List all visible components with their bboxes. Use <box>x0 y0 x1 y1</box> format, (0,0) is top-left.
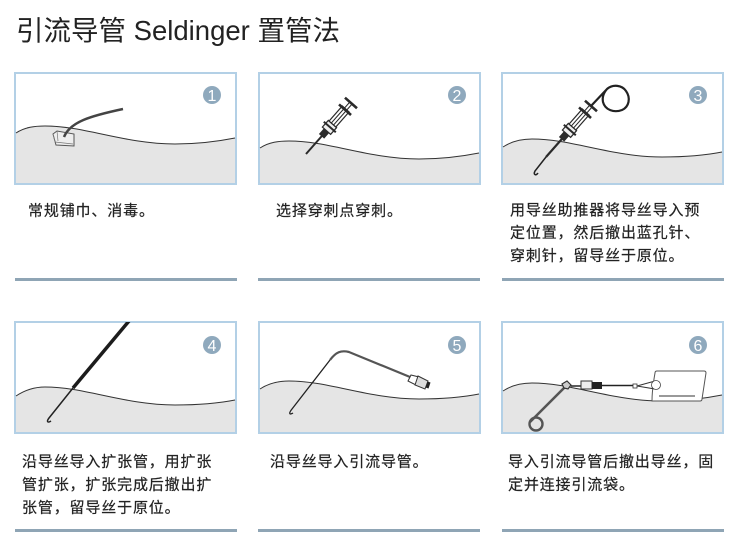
panel: step 4 <box>15 321 236 433</box>
step 2 illustration frame <box>259 73 480 184</box>
panel: step 2 <box>259 73 480 184</box>
step 5 skin <box>260 381 479 432</box>
step 6 text: 导入引流导管后撤出导丝，固 <box>508 454 714 470</box>
step 4 rule <box>15 529 237 532</box>
step 3 badge <box>689 86 707 105</box>
icon: catheter, connector and drainage bag <box>530 371 706 430</box>
step 1 badge <box>203 86 221 105</box>
panel: step 1 <box>15 73 236 184</box>
step 4 badge <box>203 336 221 355</box>
step 1 illustration frame <box>15 73 236 184</box>
step 6 rule <box>502 529 724 532</box>
step 6 text: 定并连接引流袋。 <box>508 476 635 494</box>
step 3 badge: 3 <box>694 88 703 105</box>
step 5 badge <box>448 336 466 355</box>
title: 引流导管 Seldinger 置管法 <box>16 15 340 46</box>
step 5 illustration frame <box>259 322 480 433</box>
step 3 rule <box>502 278 724 281</box>
step 2 text: 选择穿刺点穿刺。 <box>276 202 403 220</box>
step 2 rule <box>258 278 480 281</box>
step 5 text: 沿导丝导入引流导管。 <box>270 454 429 470</box>
step 4 text: 张管，留导丝于原位。 <box>22 500 181 516</box>
icon: drape pad and catheter <box>53 109 123 146</box>
panel: step 3 <box>502 73 723 184</box>
step 6 badge: 6 <box>694 338 703 355</box>
step 4 text: 沿导丝导入扩张管，用扩张 <box>22 454 212 470</box>
step 2 skin <box>260 141 479 183</box>
step 4 text: 管扩张，扩张完成后撤出扩 <box>22 476 212 494</box>
step 3 text: 穿刺针，留导丝于原位。 <box>510 248 684 264</box>
step 2 badge <box>448 86 466 105</box>
step 3 skin <box>503 139 722 183</box>
step 1 badge: 1 <box>208 88 217 105</box>
step 3 text: 定位置，然后撤出蓝孔针、 <box>510 224 700 242</box>
step 6 illustration frame <box>502 322 723 433</box>
icon: dilator over guide wire <box>48 321 129 422</box>
step 3 text: 用导丝助推器将导丝导入预 <box>510 202 700 219</box>
step 4 text <box>22 454 212 516</box>
step 5 badge: 5 <box>453 338 462 355</box>
step 1 text: 常规铺巾、消毒。 <box>28 202 155 220</box>
icon: drainage catheter with connector <box>290 351 429 414</box>
icon: syringe <box>300 98 357 159</box>
panel: step 6 <box>502 322 723 433</box>
step 6 text <box>508 454 714 494</box>
step 6 skin <box>503 383 722 432</box>
step 6 badge <box>689 336 707 355</box>
panel: step 5 <box>259 322 480 433</box>
icon: syringe with guide wire coil <box>534 86 629 175</box>
step 3 text <box>510 202 700 264</box>
step 5 rule <box>258 529 480 532</box>
step 4 illustration frame <box>15 322 236 433</box>
step 1 rule <box>15 278 237 281</box>
step 3 illustration frame <box>502 73 723 184</box>
step 2 badge: 2 <box>453 88 462 105</box>
step 4 skin <box>16 387 235 432</box>
step 4 badge: 4 <box>208 338 217 355</box>
step 1 skin <box>16 126 235 183</box>
